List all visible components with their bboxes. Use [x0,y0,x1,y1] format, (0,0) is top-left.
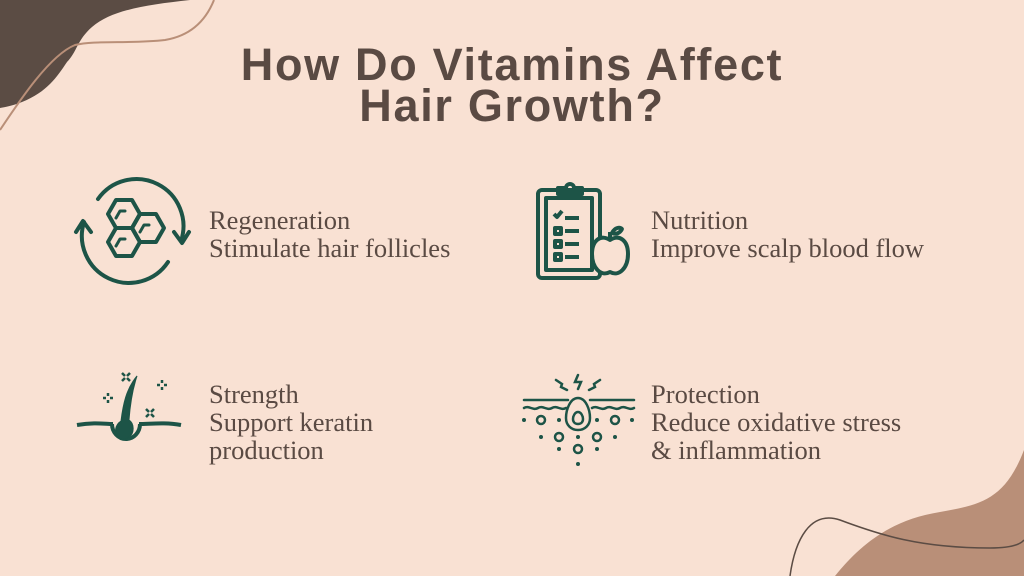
text: strength: Strength [209,379,299,409]
text: protection: Protection [651,379,760,409]
title: How Do Vitamins Affect [241,39,783,90]
title: Hair Growth? [359,80,665,131]
text: protection: & inflammation [651,435,821,465]
text: protection [651,380,901,464]
text: protection: Reduce oxidative stress [651,407,901,437]
text: regeneration [209,206,450,262]
text: strength: Support keratin [209,407,373,437]
text: strength [209,380,373,464]
text: nutrition [651,206,924,262]
title [0,44,1024,126]
text: nutrition: Nutrition [651,205,748,235]
text: nutrition: Improve scalp blood flow [651,233,924,263]
text: strength: production [209,435,324,465]
text: regeneration: Stimulate hair follicles [209,233,450,263]
text: regeneration: Regeneration [209,205,350,235]
